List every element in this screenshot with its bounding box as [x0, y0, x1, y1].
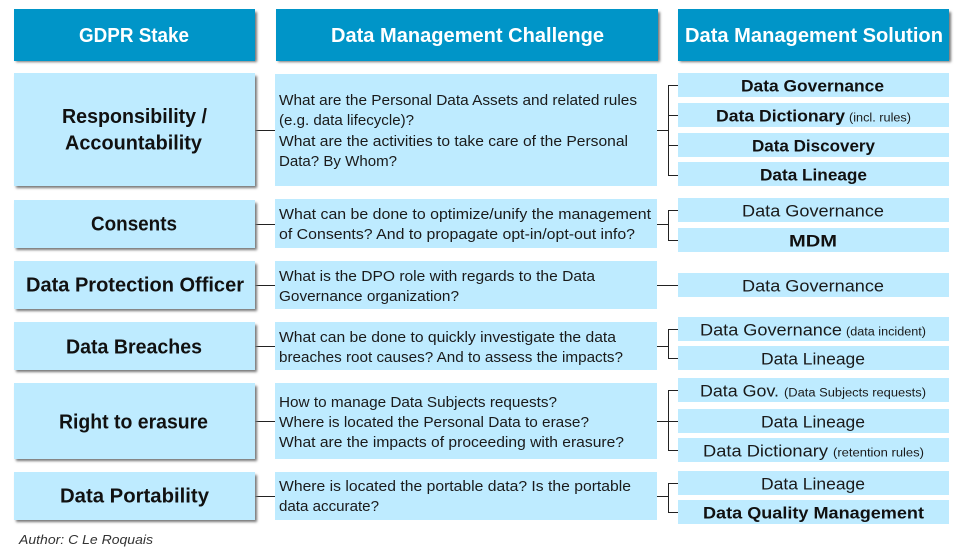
solution: Data Dictionary: Data Dictionary: [716, 108, 846, 126]
solution: Data Lineage (portability): [678, 471, 949, 495]
solution: Data Quality Management: Data Quality Management: [703, 504, 925, 522]
challenge: responsibility: What are the Personal Data Assets and related rules: [279, 92, 637, 109]
challenge: portability: data accurate?: [279, 498, 379, 515]
solution: Data Discovery: [678, 133, 949, 157]
stake: Consents: [14, 200, 257, 250]
challenge: portability: [275, 472, 657, 520]
stake: Responsibility / Accountability: Responsibility /: [62, 105, 207, 128]
solution: Data Governance (DPO): [678, 273, 949, 297]
solution: Data Governance (data incident): (data incident): [846, 326, 926, 338]
challenge: breaches: What can be done to quickly investigate the data: [279, 329, 617, 346]
solution: Data Lineage (portability): Data Lineage: [761, 476, 865, 494]
header: GDPR Stake: GDPR Stake: [79, 25, 189, 47]
header: GDPR Stake: [14, 9, 257, 62]
stake: Data Portability: Data Portability: [60, 484, 210, 508]
challenge: responsibility: Data? By Whom?: [279, 153, 397, 170]
challenge: erasure: Where is located the Personal Data to erase?: [279, 414, 589, 431]
challenge: erasure: What are the impacts of proceeding with erasure?: [279, 434, 624, 451]
stake: Right to erasure: [14, 383, 257, 461]
solution: Data Dictionary (retention rules): (retention rules): [833, 448, 924, 460]
challenge: DPO: What is the DPO role with regards to the Data: [279, 268, 596, 285]
challenge: erasure: [275, 383, 657, 459]
connectors: challenge to solution: [657, 86, 679, 512]
challenge: portability: Where is located the portable data? Is the portable: [279, 478, 631, 495]
challenge: erasure: How to manage Data Subjects requests?: [279, 394, 557, 411]
header: Data Management Solution: [678, 9, 951, 62]
panel: challenges column: [275, 74, 657, 520]
solution: Data Dictionary (retention rules): Data Dictionary: [703, 442, 829, 460]
stake: Data Protection Officer: [14, 261, 257, 311]
solution: Data Governance (data incident): Data Governance: [700, 322, 842, 340]
stake: Responsibility / Accountability: [14, 73, 257, 188]
solution: Data Lineage: [678, 162, 949, 186]
solution: Data Lineage (erasure): [678, 409, 949, 433]
challenge: responsibility: What are the activities to take care of the Personal: [279, 133, 628, 150]
panel: solutions column: [678, 73, 949, 524]
solution: Data Governance (consents): Data Governance: [742, 202, 884, 220]
challenge: DPO: [275, 261, 657, 309]
solution: Data Lineage (breaches): Data Lineage: [761, 350, 865, 368]
solution: Data Gov. (Data Subjects requests): Data Gov.: [700, 382, 779, 400]
stake: Responsibility / Accountability: Accountability: [65, 132, 203, 154]
challenge: consents: What can be done to optimize/unify the management: [279, 206, 652, 223]
header: Data Management Challenge: Data Management Challenge: [331, 25, 604, 47]
solution: Data Governance (consents): [678, 198, 949, 222]
stake: Data Protection Officer: Data Protection Officer: [26, 274, 244, 296]
solution: Data Quality Management: [678, 500, 949, 524]
solution: Data Lineage (erasure): Data Lineage: [761, 414, 865, 432]
stake: Data Breaches: [14, 322, 257, 372]
solution: Data Governance: [678, 73, 949, 97]
stake: Data Breaches: Data Breaches: [66, 336, 202, 358]
challenge: responsibility: (e.g. data lifecycle)?: [279, 112, 414, 129]
solution: Data Governance: Data Governance: [741, 78, 884, 96]
header: Data Management Challenge: [276, 9, 660, 62]
solution: Data Gov. (Data Subjects requests): (Data Subjects requests): [784, 388, 926, 400]
connectors: stake to challenge: [255, 130, 276, 496]
solution: MDM: [678, 228, 949, 252]
stake: Right to erasure: Right to erasure: [59, 410, 208, 434]
challenge: breaches: breaches root causes? And to assess the impacts?: [279, 349, 623, 366]
solution: Data Governance (DPO): Data Governance: [742, 278, 884, 296]
author credit: Author: C Le Roquais: [18, 533, 153, 547]
solution: Data Dictionary: [678, 103, 949, 127]
solution: Data Dictionary: (incl. rules): [849, 112, 911, 124]
challenge: breaches: [275, 322, 657, 370]
solution: Data Discovery: Data Discovery: [752, 138, 876, 156]
challenge: responsibility: [275, 74, 657, 186]
solution: Data Lineage (breaches): [678, 346, 949, 370]
solution: MDM: MDM: [789, 232, 837, 250]
challenge: consents: [275, 199, 657, 248]
challenge: consents: of Consents? And to propagate opt-in/opt-out info?: [279, 226, 635, 243]
solution: Data Lineage: Data Lineage: [760, 166, 867, 184]
panel: GDPR stakes column: [14, 73, 257, 522]
header: Data Management Solution: Data Management Solution: [685, 25, 943, 47]
stake: Data Portability: [14, 472, 257, 522]
stake: Consents: Consents: [91, 212, 177, 236]
challenge: DPO: Governance organization?: [279, 288, 459, 305]
solution: Data Gov. (Data Subjects requests): [678, 378, 949, 402]
solution: Data Dictionary (retention rules): [678, 438, 949, 462]
solution: Data Governance (data incident): [678, 317, 949, 341]
